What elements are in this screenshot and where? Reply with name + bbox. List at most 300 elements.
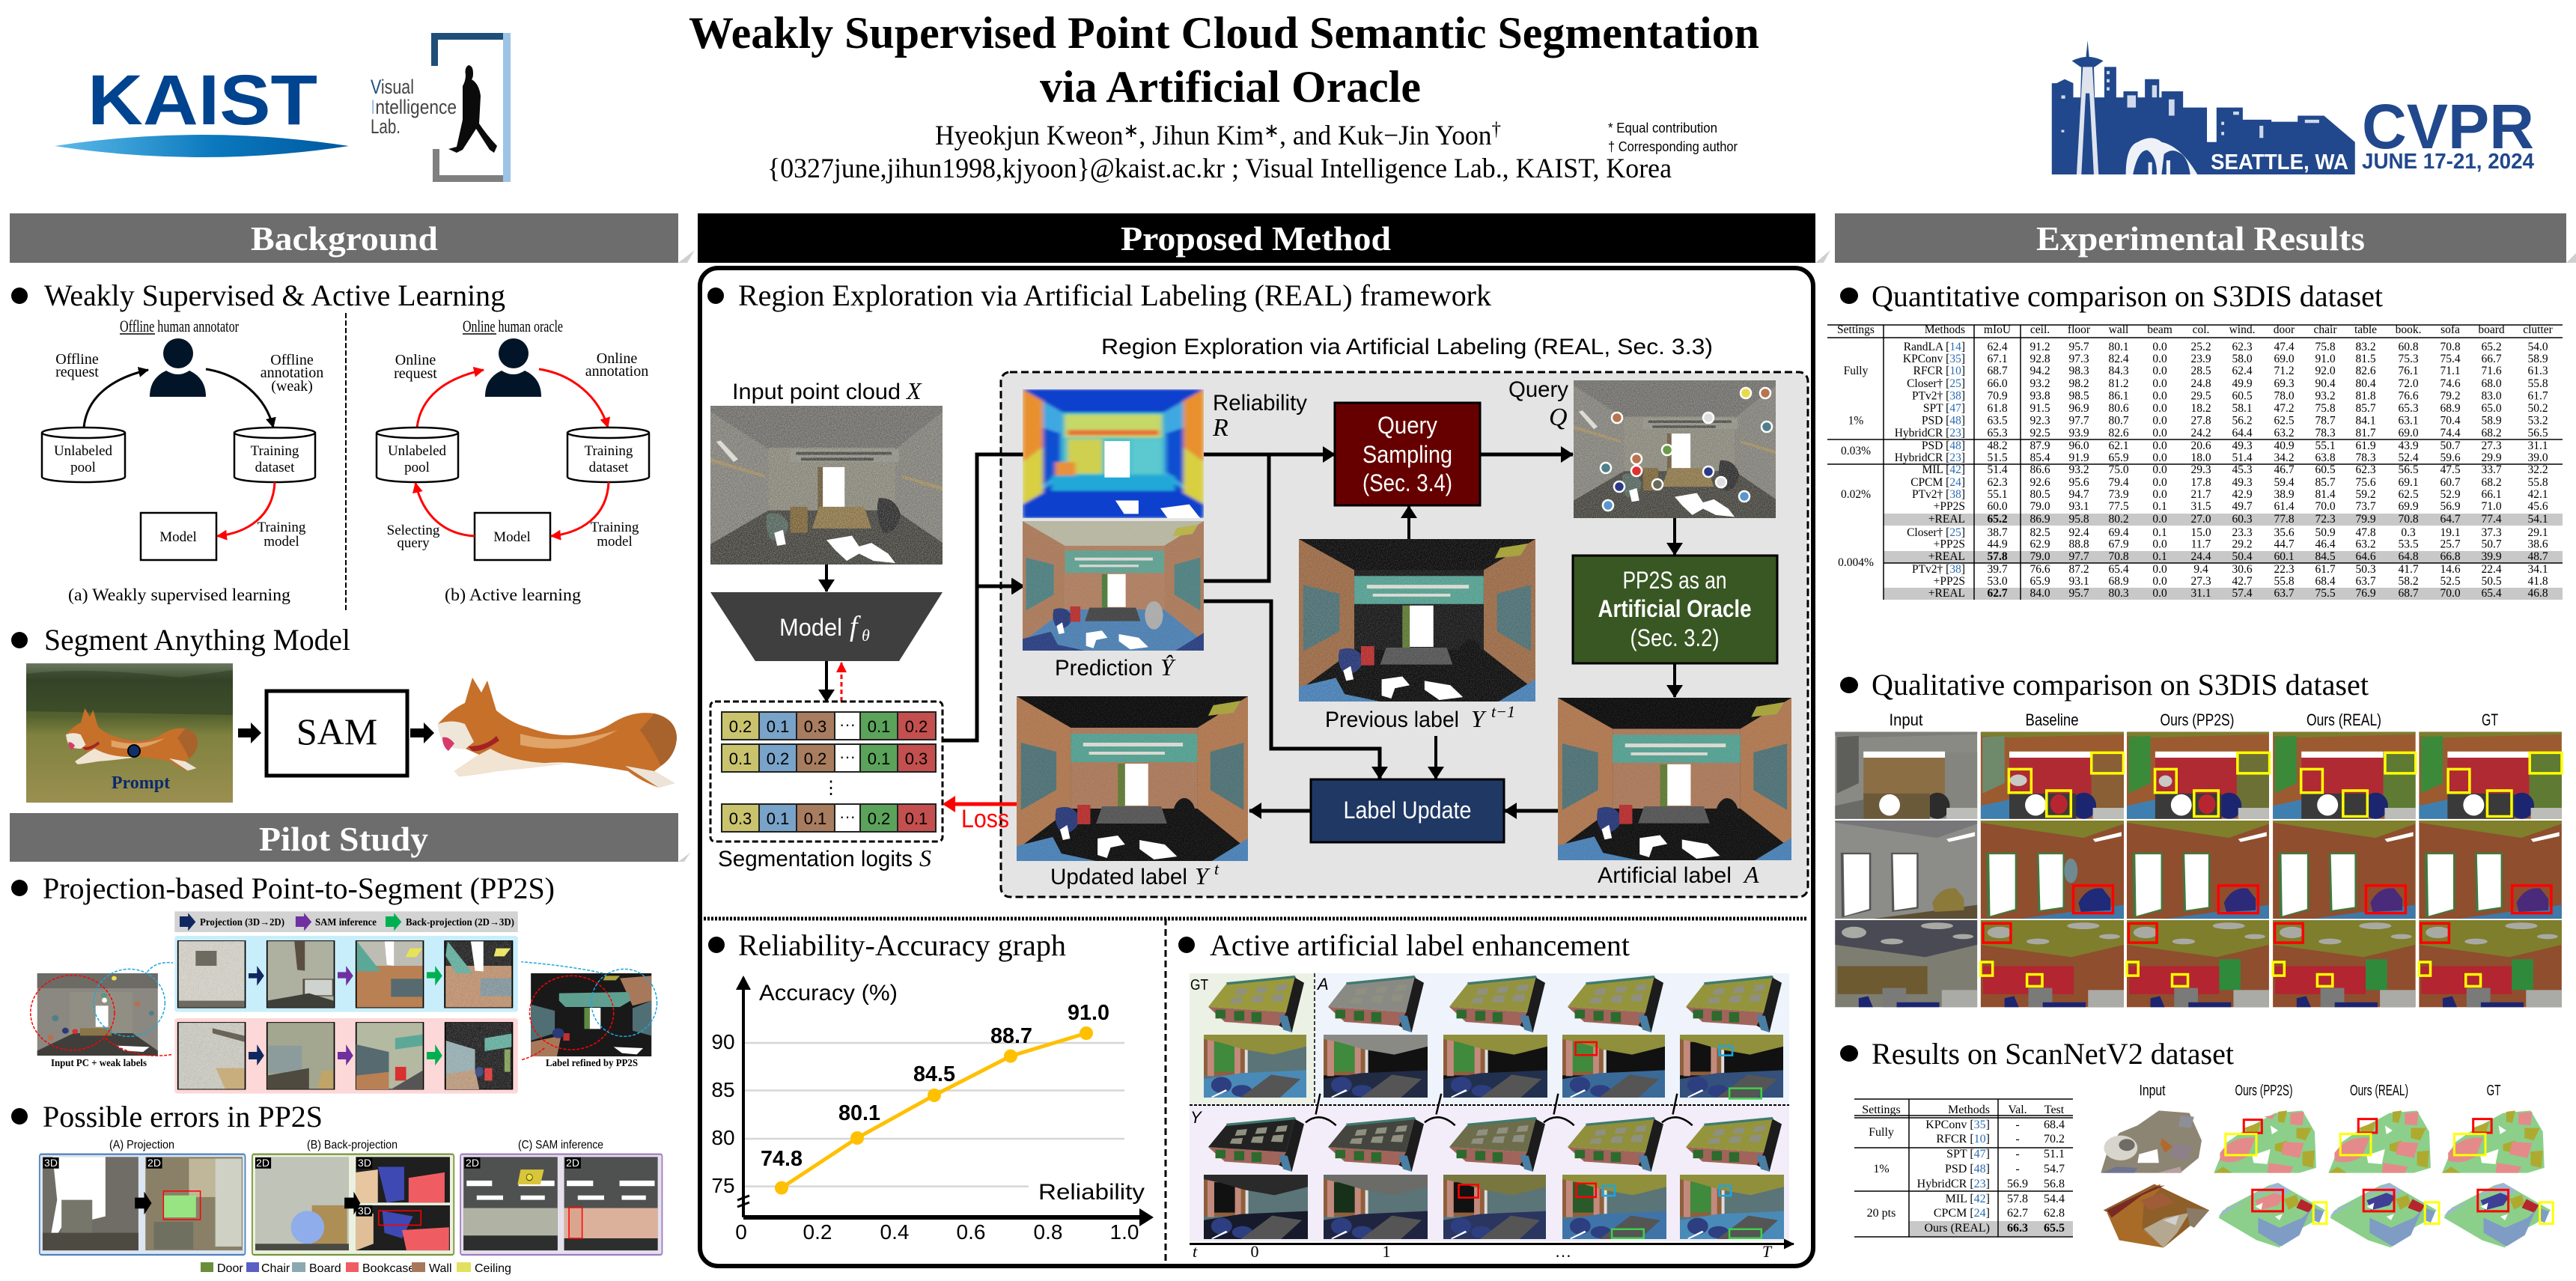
diagram: weakly supervised learning: (a) Weakly supervised learning bbox=[68, 585, 291, 604]
table: S3DIS quantitative results: 50.7 bbox=[2440, 439, 2461, 452]
table: ScanNetV2 results: KPConv [35] bbox=[1925, 1119, 1990, 1131]
chart: reliability vs accuracy: 84.5 bbox=[913, 1062, 955, 1086]
table: S3DIS quantitative results: 95.7 bbox=[2068, 341, 2089, 353]
table: S3DIS quantitative results: 74.6 bbox=[2440, 377, 2461, 390]
arrow bbox=[1673, 663, 1676, 697]
table: S3DIS quantitative results: 79.2 bbox=[2440, 389, 2461, 403]
image: prediction bbox=[1023, 521, 1204, 681]
table: S3DIS quantitative results: 0.0 bbox=[2152, 341, 2167, 353]
diagram: active learning: Training bbox=[585, 443, 633, 459]
diagram: weakly supervised learning bbox=[42, 317, 323, 604]
figure: active artificial label enhancement: … bbox=[1555, 1242, 1571, 1261]
diagram: active learning: Online bbox=[395, 352, 436, 368]
table: S3DIS quantitative results: 49.9 bbox=[2232, 377, 2253, 390]
section title: active artificial label enhancement: Active artificial label enhancement bbox=[1210, 928, 1630, 962]
table: S3DIS quantitative results: 0.1 bbox=[2152, 550, 2167, 563]
table: S3DIS quantitative results: 0.0 bbox=[2152, 377, 2167, 390]
table: S3DIS quantitative results: 75.5 bbox=[2315, 587, 2336, 600]
table: S3DIS quantitative results: 18.0 bbox=[2190, 451, 2211, 464]
table: S3DIS quantitative results: 59.6 bbox=[2440, 451, 2461, 464]
diagram: active learning: pool bbox=[404, 460, 430, 475]
block: model: Model bbox=[779, 614, 842, 641]
section title: qualitative comparison: Qualitative comparison on S3DIS dataset bbox=[1872, 668, 2369, 702]
panel: segmentation logits: 0.2 bbox=[767, 749, 789, 768]
table: S3DIS quantitative results: 60.5 bbox=[2232, 389, 2253, 403]
section title: reliability-accuracy graph: Reliability-Accuracy graph bbox=[738, 928, 1066, 962]
figure: active artificial label enhancement: 0 bbox=[1250, 1242, 1259, 1261]
table: S3DIS quantitative results: 82.4 bbox=[2108, 353, 2129, 365]
section title: Possible errors: Possible errors in PP2S bbox=[43, 1100, 323, 1134]
table: S3DIS quantitative results: 58.1 bbox=[2232, 402, 2253, 415]
table: S3DIS quantitative results: 64.4 bbox=[2232, 427, 2253, 439]
table: S3DIS quantitative results: 0.0 bbox=[2152, 463, 2167, 476]
block: query sampling: Sampling bbox=[1362, 441, 1452, 468]
table: S3DIS quantitative results: 0.0 bbox=[2152, 451, 2167, 464]
figure: active artificial label enhancement: T bbox=[1762, 1242, 1773, 1261]
table: S3DIS quantitative results: 70.0 bbox=[2440, 587, 2461, 600]
diagram: PP2S pipeline: Back-projection (2D→3D) bbox=[406, 917, 514, 928]
table: S3DIS quantitative results: 42.7 bbox=[2232, 575, 2253, 588]
table: S3DIS quantitative results: 50.5 bbox=[2481, 575, 2502, 588]
table: S3DIS quantitative results: 77.8 bbox=[2274, 513, 2295, 526]
table: S3DIS quantitative results: +REAL bbox=[1928, 587, 1965, 600]
table: S3DIS quantitative results: 0.03% bbox=[1841, 445, 1871, 457]
table: S3DIS quantitative results: 65.4 bbox=[2481, 587, 2502, 600]
table: S3DIS quantitative results: 22.3 bbox=[2274, 563, 2295, 576]
table: S3DIS quantitative results: 80.6 bbox=[2108, 402, 2129, 415]
table: S3DIS quantitative results: HybridCR [23] bbox=[1895, 427, 1965, 439]
diagram: PP2S pipeline: Input PC + weak labels bbox=[51, 1058, 147, 1069]
table: S3DIS quantitative results: 85.7 bbox=[2355, 402, 2376, 415]
photo: corgi with prompt: Prompt bbox=[112, 773, 170, 793]
table: S3DIS quantitative results: 97.7 bbox=[2068, 550, 2089, 563]
table: ScanNetV2 results: SPT [47] bbox=[1946, 1148, 1990, 1160]
table: S3DIS quantitative results: 24.2 bbox=[2190, 427, 2211, 439]
diagram: active learning: model bbox=[597, 534, 633, 550]
table: S3DIS quantitative results: 81.7 bbox=[2355, 427, 2376, 439]
panel: segmentation logits: 0.1 bbox=[868, 717, 890, 736]
table: S3DIS quantitative results: 92.3 bbox=[2030, 415, 2050, 427]
table: S3DIS quantitative results: clutter bbox=[2523, 323, 2554, 336]
arrow bbox=[1505, 809, 1558, 813]
table: S3DIS quantitative results: RandLA [14] bbox=[1904, 341, 1965, 353]
legend: semantic classes: Board bbox=[309, 1262, 341, 1275]
diagram: active learning: dataset bbox=[589, 460, 629, 475]
table: S3DIS quantitative results: 61.4 bbox=[2274, 500, 2295, 513]
table: S3DIS quantitative results: 80.7 bbox=[2108, 415, 2129, 427]
table: S3DIS quantitative results: 23.9 bbox=[2190, 353, 2211, 365]
table: S3DIS quantitative results: 46.7 bbox=[2274, 463, 2295, 476]
logo: Visual Intelligence Lab: Lab. bbox=[371, 115, 401, 138]
section title: REAL framework: Region Exploration via Artificial Labeling (REAL) framework bbox=[738, 279, 1491, 312]
panel: segmentation logits: 0.1 bbox=[767, 809, 789, 828]
table: S3DIS quantitative results: 59.4 bbox=[2274, 476, 2295, 489]
table: S3DIS quantitative results: 39.9 bbox=[2481, 550, 2502, 563]
diagram: weakly supervised learning: Training bbox=[258, 520, 306, 535]
table: S3DIS quantitative results: 62.5 bbox=[2398, 488, 2419, 501]
table: S3DIS quantitative results: 68.9 bbox=[2440, 402, 2461, 415]
table: S3DIS quantitative results: 1% bbox=[1848, 415, 1863, 427]
table: S3DIS quantitative results: 0.0 bbox=[2152, 402, 2167, 415]
table: S3DIS quantitative results: 68.2 bbox=[2481, 476, 2502, 489]
title bbox=[689, 8, 1759, 112]
table: S3DIS quantitative results: 47.5 bbox=[2440, 463, 2461, 476]
table: S3DIS quantitative results: 52.4 bbox=[2398, 451, 2419, 464]
heading: Proposed Method: Proposed Method bbox=[1121, 219, 1391, 258]
logo: Visual Intelligence Lab: Visual bbox=[371, 76, 414, 98]
image: segmented corgi bbox=[438, 678, 677, 788]
table: S3DIS quantitative results: Fully bbox=[1844, 365, 1869, 377]
table: S3DIS quantitative results: 31.1 bbox=[2190, 587, 2211, 600]
diagram: active learning: request bbox=[394, 365, 437, 382]
table: S3DIS quantitative results: 0.0 bbox=[2152, 575, 2167, 588]
table: S3DIS quantitative results: 25.2 bbox=[2190, 341, 2211, 353]
arrow bbox=[410, 722, 434, 743]
figure: ScanNetV2 qualitative results: Input bbox=[2140, 1083, 2166, 1099]
authors and affiliation: , and Kuk−Jin Yoon bbox=[1279, 121, 1492, 151]
panel: possible errors figure: 2D bbox=[256, 1157, 270, 1169]
table: ScanNetV2 results: Settings bbox=[1862, 1104, 1901, 1116]
section title: PP2S: Projection-based Point-to-Segment (PP2S) bbox=[43, 871, 555, 905]
table: S3DIS quantitative results: wind. bbox=[2229, 323, 2255, 336]
arrows: logits to reliability and prediction bbox=[943, 454, 1023, 740]
table: S3DIS quantitative results: 87.9 bbox=[2030, 439, 2050, 452]
panel: segmentation logits: 0.3 bbox=[729, 809, 752, 828]
image: updated label: Updated label bbox=[1050, 865, 1187, 889]
table: S3DIS quantitative results: 0.0 bbox=[2152, 563, 2167, 576]
table: S3DIS quantitative results: floor bbox=[2068, 323, 2091, 336]
arrow bbox=[825, 661, 828, 702]
table: S3DIS quantitative results: 18.2 bbox=[2190, 402, 2211, 415]
table: S3DIS quantitative results: 23.3 bbox=[2232, 526, 2253, 539]
table: S3DIS quantitative results: 98.2 bbox=[2068, 377, 2089, 390]
arrow: loss: Loss bbox=[961, 805, 1009, 833]
block: label update bbox=[1311, 779, 1504, 842]
diagram: active learning: Selecting bbox=[387, 523, 440, 538]
table: S3DIS quantitative results: 68.7 bbox=[2398, 587, 2419, 600]
table: S3DIS quantitative results: 41.8 bbox=[2527, 575, 2548, 588]
table: ScanNetV2 results: 66.3 bbox=[2007, 1222, 2028, 1235]
table: S3DIS quantitative results: 81.8 bbox=[2355, 389, 2376, 403]
table: S3DIS quantitative results: 92.5 bbox=[2030, 427, 2050, 439]
block: PP2S as artificial oracle: PP2S as an bbox=[1623, 567, 1726, 594]
chart: reliability vs accuracy: 1.0 bbox=[1110, 1220, 1139, 1244]
chart: reliability vs accuracy: Reliability bbox=[1038, 1180, 1145, 1205]
diagram: active learning: Online human oracle bbox=[463, 317, 563, 335]
table: ScanNetV2 results: - bbox=[2015, 1148, 2020, 1160]
table: S3DIS quantitative results: 70.0 bbox=[2315, 500, 2336, 513]
table: S3DIS quantitative results: 60.1 bbox=[2274, 550, 2295, 563]
diagram: active learning: query bbox=[397, 535, 430, 551]
table: S3DIS quantitative results: 34.2 bbox=[2274, 451, 2295, 464]
image: input point cloud: Input point cloud bbox=[732, 380, 901, 404]
table: S3DIS quantitative results: 25.7 bbox=[2440, 538, 2461, 551]
table: S3DIS quantitative results: 19.1 bbox=[2440, 526, 2461, 539]
table: S3DIS quantitative results: 83.2 bbox=[2355, 341, 2376, 353]
table: S3DIS quantitative results: 58.9 bbox=[2481, 415, 2502, 427]
table: S3DIS quantitative results: 92.4 bbox=[2068, 526, 2089, 539]
diagram: PP2S pipeline: Projection (3D→2D) bbox=[200, 917, 284, 928]
table: ScanNetV2 results: Methods bbox=[1948, 1104, 1990, 1116]
image: input point cloud: X bbox=[905, 377, 922, 404]
panel: possible errors figure: (B) Back-projection bbox=[307, 1139, 398, 1151]
table: ScanNetV2 results: HybridCR [23] bbox=[1917, 1178, 1990, 1190]
table: ScanNetV2 results: Test bbox=[2044, 1104, 2065, 1116]
table: S3DIS quantitative results: 62.4 bbox=[1987, 341, 2008, 353]
table: S3DIS quantitative results: mIoU bbox=[1984, 323, 2011, 336]
arrows: reliability and prediction to query sampling bbox=[1204, 454, 1334, 581]
table: S3DIS quantitative results: 50.3 bbox=[2355, 563, 2376, 576]
image: query bbox=[1508, 377, 1776, 518]
authors and affiliation: ∗ bbox=[1124, 120, 1139, 142]
table: S3DIS quantitative results: 96.0 bbox=[2068, 439, 2089, 452]
table: S3DIS quantitative results: PTv2† [38] bbox=[1912, 563, 1965, 576]
legend: semantic classes: Chair bbox=[261, 1262, 290, 1275]
table: S3DIS quantitative results: 79.4 bbox=[2108, 476, 2129, 489]
table: S3DIS quantitative results: 31.1 bbox=[2527, 439, 2548, 452]
logo: Visual Intelligence Lab: Intelligence bbox=[371, 96, 457, 118]
table: S3DIS quantitative results: 62.7 bbox=[1987, 587, 2008, 600]
heading: Background bbox=[10, 213, 695, 263]
table: S3DIS quantitative results: 27.3 bbox=[2481, 439, 2502, 452]
table: ScanNetV2 results: 51.1 bbox=[2044, 1148, 2065, 1160]
table: S3DIS quantitative results: 52.9 bbox=[2440, 488, 2461, 501]
panel: segmentation logits: ⋮ bbox=[822, 778, 840, 798]
table: ScanNetV2 results: 68.4 bbox=[2044, 1119, 2065, 1131]
table: ScanNetV2 results bbox=[1854, 1099, 2073, 1237]
table: S3DIS quantitative results: 97.3 bbox=[2068, 353, 2089, 365]
table: S3DIS quantitative results: 62.3 bbox=[1987, 476, 2008, 489]
table: ScanNetV2 results: 54.7 bbox=[2044, 1163, 2065, 1175]
table: S3DIS quantitative results: +REAL bbox=[1928, 550, 1965, 563]
panel: possible errors figure: (A) Projection bbox=[109, 1139, 174, 1151]
table: S3DIS quantitative results: 63.7 bbox=[2274, 587, 2295, 600]
table: S3DIS quantitative results: 51.4 bbox=[2232, 451, 2253, 464]
table: S3DIS quantitative results: 93.9 bbox=[2068, 427, 2089, 439]
chart: reliability vs accuracy: 80 bbox=[711, 1126, 735, 1149]
arrow: gradient bbox=[840, 663, 843, 702]
table: S3DIS quantitative results: 73.7 bbox=[2355, 500, 2376, 513]
table: S3DIS quantitative results: 41.7 bbox=[2398, 563, 2419, 576]
figure: ScanNetV2 qualitative results: Ours (PP2S) bbox=[2235, 1083, 2292, 1099]
table: ScanNetV2 results: Ours (REAL) bbox=[1924, 1222, 1990, 1235]
chart: reliability vs accuracy: 0.6 bbox=[957, 1220, 985, 1244]
chart: reliability vs accuracy: 91.0 bbox=[1068, 1001, 1109, 1025]
table: ScanNetV2 results: 56.8 bbox=[2044, 1178, 2065, 1190]
image: reliability heatmap: Reliability bbox=[1213, 391, 1307, 416]
table: S3DIS quantitative results: 0.1 bbox=[2152, 526, 2167, 539]
table: S3DIS quantitative results: 65.3 bbox=[2398, 402, 2419, 415]
table: S3DIS quantitative results: 78.7 bbox=[2315, 415, 2336, 427]
chart: reliability vs accuracy: 88.7 bbox=[990, 1024, 1032, 1048]
table: S3DIS quantitative results: 63.7 bbox=[2355, 575, 2376, 588]
table: S3DIS quantitative results: 35.6 bbox=[2274, 526, 2295, 539]
table: S3DIS quantitative results: 95.8 bbox=[2068, 513, 2089, 526]
table: S3DIS quantitative results: 81.4 bbox=[2315, 488, 2336, 501]
table: S3DIS quantitative results: 50.7 bbox=[2481, 538, 2502, 551]
table: S3DIS quantitative results: 56.9 bbox=[2440, 500, 2461, 513]
table: S3DIS quantitative results: 93.2 bbox=[2030, 377, 2050, 390]
image: updated label: Y bbox=[1195, 862, 1211, 889]
table: S3DIS quantitative results: 80.3 bbox=[2108, 587, 2129, 600]
table: S3DIS quantitative results: 57.4 bbox=[2232, 587, 2253, 600]
table: S3DIS quantitative results: 87.2 bbox=[2068, 563, 2089, 576]
footnotes bbox=[1608, 121, 1738, 154]
divider bbox=[345, 313, 347, 612]
arrow bbox=[1480, 452, 1573, 457]
panel: segmentation logits: 0.3 bbox=[905, 749, 928, 768]
figure: ScanNetV2 qualitative results: GT bbox=[2487, 1083, 2500, 1099]
panel: proposed method frame bbox=[700, 268, 1813, 1266]
figure: qualitative comparison grid: Input bbox=[1890, 711, 1922, 729]
block: model: f bbox=[850, 611, 861, 642]
table: S3DIS quantitative results: 78.3 bbox=[2355, 451, 2376, 464]
image: previous label bbox=[1299, 539, 1535, 732]
figure: active artificial label enhancement: GT bbox=[1190, 977, 1208, 994]
panel: segmentation logits: 0.1 bbox=[767, 717, 789, 736]
table: S3DIS quantitative results: 40.9 bbox=[2274, 439, 2295, 452]
table: S3DIS quantitative results: PTv2† [38] bbox=[1912, 488, 1965, 501]
chart: reliability vs accuracy: 90 bbox=[711, 1030, 735, 1053]
table: S3DIS quantitative results: chair bbox=[2314, 323, 2337, 336]
panel: segmentation logits: Segmentation logits bbox=[718, 847, 913, 871]
table: S3DIS quantitative results: 71.1 bbox=[2440, 365, 2461, 377]
table: S3DIS quantitative results: CPCM [24] bbox=[1910, 476, 1965, 489]
table: S3DIS quantitative results: 24.8 bbox=[2190, 377, 2211, 390]
table: S3DIS quantitative results: 81.5 bbox=[2355, 353, 2376, 365]
table: ScanNetV2 results: - bbox=[2015, 1163, 2020, 1175]
table: S3DIS quantitative results: 65.9 bbox=[2030, 575, 2050, 588]
table: S3DIS quantitative results: 62.3 bbox=[2355, 463, 2376, 476]
block: label update: Label Update bbox=[1343, 797, 1472, 824]
table: S3DIS quantitative results: 0.3 bbox=[2401, 526, 2416, 539]
logo: CVPR 2024 Seattle: JUNE 17-21, 2024 bbox=[2362, 150, 2534, 174]
table: S3DIS quantitative results: 81.2 bbox=[2108, 377, 2129, 390]
arrow bbox=[1249, 809, 1311, 813]
authors and affiliation: {0327june,jihun1998,kjyoon}@kaist.ac.kr ; Visual Intelligence Lab., KAIST, Korea bbox=[767, 153, 1672, 184]
panel: segmentation logits: ··· bbox=[839, 807, 856, 826]
table: S3DIS quantitative results: 64.7 bbox=[2440, 513, 2461, 526]
table: S3DIS quantitative results: book. bbox=[2396, 323, 2421, 336]
table: ScanNetV2 results: 62.8 bbox=[2044, 1207, 2065, 1220]
table: S3DIS quantitative results: RFCR [10] bbox=[1913, 365, 1965, 377]
table: S3DIS quantitative results: 70.8 bbox=[2440, 341, 2461, 353]
table: S3DIS quantitative results: 53.5 bbox=[2398, 538, 2419, 551]
logo: Visual Intelligence Lab bbox=[371, 33, 511, 182]
table: S3DIS quantitative results: +PP2S bbox=[1934, 575, 1965, 588]
table: S3DIS quantitative results: 59.2 bbox=[2355, 488, 2376, 501]
diagram: active learning: Model bbox=[493, 529, 531, 545]
table: S3DIS quantitative results: 39.0 bbox=[2527, 451, 2548, 464]
table: S3DIS quantitative results: 75.3 bbox=[2398, 353, 2419, 365]
table: S3DIS quantitative results: 92.6 bbox=[2030, 476, 2050, 489]
panel: segmentation logits: 0.1 bbox=[868, 749, 890, 768]
panel: possible errors figure: 2D bbox=[466, 1157, 479, 1169]
table: S3DIS quantitative results: 46.8 bbox=[2527, 587, 2548, 600]
table: S3DIS quantitative results: 55.8 bbox=[2274, 575, 2295, 588]
block: model: θ bbox=[862, 626, 870, 645]
table: S3DIS quantitative results: 45.3 bbox=[2232, 463, 2253, 476]
table: S3DIS quantitative results: 45.6 bbox=[2527, 500, 2548, 513]
table: S3DIS quantitative results: 70.4 bbox=[2440, 415, 2461, 427]
figure: active artificial label enhancement bbox=[1190, 973, 1794, 1261]
table: S3DIS quantitative results: 84.3 bbox=[2108, 365, 2129, 377]
table: S3DIS quantitative results: 0.0 bbox=[2152, 439, 2167, 452]
title: via Artificial Oracle bbox=[1040, 62, 1421, 112]
authors and affiliation: † bbox=[1492, 118, 1501, 140]
table: S3DIS quantitative results: 91.9 bbox=[2068, 451, 2089, 464]
panel: segmentation logits: ··· bbox=[839, 715, 856, 734]
table: S3DIS quantitative results: 95.7 bbox=[2068, 587, 2089, 600]
table: ScanNetV2 results: 56.9 bbox=[2007, 1178, 2028, 1190]
logo: CVPR 2024 Seattle bbox=[2052, 40, 2534, 174]
table: S3DIS quantitative results: 86.6 bbox=[2030, 463, 2050, 476]
table: ScanNetV2 results: - bbox=[2015, 1133, 2020, 1145]
table: S3DIS quantitative results: 75.0 bbox=[2108, 463, 2129, 476]
table: S3DIS quantitative results: 83.0 bbox=[2481, 389, 2502, 403]
heading: Pilot Study: Pilot Study bbox=[259, 820, 428, 858]
table: S3DIS quantitative results: 82.6 bbox=[2355, 365, 2376, 377]
authors and affiliation: ∗ bbox=[1264, 120, 1279, 142]
table: S3DIS quantitative results: Methods bbox=[1925, 323, 1965, 336]
image: previous label: Previous label bbox=[1325, 708, 1459, 732]
heading: Experimental Results: Experimental Results bbox=[2036, 219, 2365, 258]
chart: reliability vs accuracy: 0.2 bbox=[803, 1220, 832, 1244]
table: S3DIS quantitative results: 82.6 bbox=[2108, 427, 2129, 439]
table: S3DIS quantitative results: 66.0 bbox=[1987, 377, 2008, 390]
image: previous label: t−1 bbox=[1491, 702, 1515, 721]
panel: possible errors figure: 2D bbox=[566, 1157, 579, 1169]
table: S3DIS quantitative results: 65.2 bbox=[2481, 341, 2502, 353]
diagram: weakly supervised learning: Model bbox=[159, 529, 197, 545]
block: query sampling bbox=[1335, 403, 1480, 505]
arrowhead bbox=[1323, 446, 1336, 463]
table: S3DIS quantitative results: 69.0 bbox=[2398, 427, 2419, 439]
table: S3DIS quantitative results: 28.5 bbox=[2190, 365, 2211, 377]
panel: REAL dashed box bbox=[1001, 372, 1808, 897]
table: ScanNetV2 results: 54.4 bbox=[2044, 1193, 2065, 1205]
arrow bbox=[825, 565, 828, 591]
table: S3DIS quantitative results: 78.0 bbox=[2274, 389, 2295, 403]
table: S3DIS quantitative results: 21.7 bbox=[2190, 488, 2211, 501]
diagram: PP2S pipeline bbox=[31, 911, 657, 1094]
image: artificial label bbox=[1558, 698, 1791, 888]
image: reliability heatmap bbox=[1023, 389, 1307, 518]
table: S3DIS quantitative results: 93.8 bbox=[2030, 389, 2050, 403]
table: ScanNetV2 results: RFCR [10] bbox=[1936, 1133, 1990, 1145]
table: S3DIS quantitative results: 70.8 bbox=[2108, 550, 2129, 563]
image: previous label: Y bbox=[1471, 705, 1487, 732]
table: S3DIS quantitative results: 54.0 bbox=[2527, 341, 2548, 353]
chart: reliability vs accuracy: 85 bbox=[711, 1078, 735, 1101]
diagram: weakly supervised learning: Offline human annotator bbox=[120, 317, 239, 335]
logo: KAIST: KAIST bbox=[88, 61, 317, 140]
panel: segmentation logits: S bbox=[919, 845, 931, 871]
table: S3DIS quantitative results: 58.9 bbox=[2527, 353, 2548, 365]
table: S3DIS quantitative results: 70.9 bbox=[1987, 389, 2008, 403]
section title: quantitative comparison: Quantitative comparison on S3DIS dataset bbox=[1872, 279, 2383, 313]
table: S3DIS quantitative results: 51.4 bbox=[1987, 463, 2008, 476]
table: S3DIS quantitative results: 0.0 bbox=[2152, 415, 2167, 427]
table: S3DIS quantitative results: 90.4 bbox=[2315, 377, 2336, 390]
table: S3DIS quantitative results: 39.7 bbox=[1987, 563, 2008, 576]
block: PP2S as artificial oracle: (Sec. 3.2) bbox=[1630, 624, 1719, 651]
table: S3DIS quantitative results: 53.2 bbox=[2527, 415, 2548, 427]
legend: semantic classes: Bookcase bbox=[362, 1262, 415, 1275]
table: S3DIS quantitative results: 72.3 bbox=[2315, 513, 2336, 526]
table: S3DIS quantitative results: 78.3 bbox=[2315, 427, 2336, 439]
table: S3DIS quantitative results: 85.4 bbox=[2030, 451, 2050, 464]
